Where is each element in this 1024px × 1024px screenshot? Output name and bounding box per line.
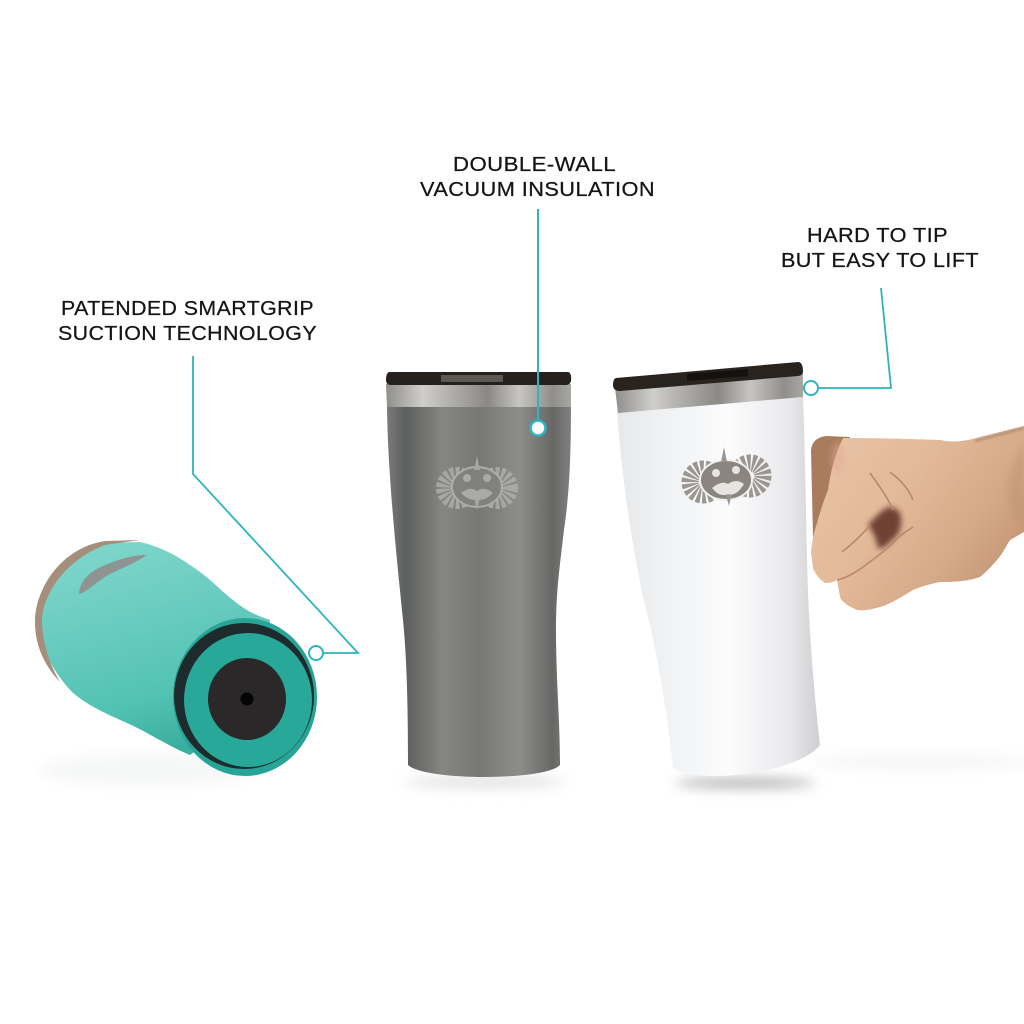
teal suction base — [184, 633, 312, 767]
fish logo on graphite tumbler — [444, 456, 510, 510]
marker dot — [530, 420, 546, 436]
lid — [386, 372, 571, 385]
wrist hair edge — [975, 428, 1024, 441]
leader line — [818, 288, 891, 388]
callout: suction technology — [58, 297, 358, 660]
finger fold shadow — [868, 507, 901, 549]
marker dot — [309, 646, 323, 660]
valve hole — [240, 692, 254, 706]
graphite body — [387, 400, 571, 777]
leader line — [193, 356, 358, 653]
steel rim — [35, 540, 140, 682]
white body — [617, 396, 820, 776]
callout heading — [420, 153, 655, 201]
callout heading: DOUBLE-WALL — [453, 153, 616, 176]
lid sip slider — [441, 375, 503, 382]
white tumbler tilted — [613, 362, 820, 776]
floor shadows — [40, 754, 1024, 788]
callout: vacuum insulation — [420, 153, 655, 436]
knuckle blush — [831, 442, 845, 474]
fist and forearm — [811, 426, 1024, 610]
laser-etched logo seen edge-on — [79, 555, 147, 594]
lid — [613, 362, 803, 391]
callout heading: VACUUM INSULATION — [420, 178, 655, 201]
callout heading — [781, 224, 979, 272]
hand gripping white tumbler — [811, 426, 1024, 610]
callout heading: HARD TO TIP — [807, 224, 948, 247]
callout heading — [58, 297, 317, 345]
lid sip slider — [687, 369, 748, 381]
finger creases — [837, 472, 913, 580]
thumb-side shadow behind fist — [811, 436, 850, 560]
rubber base outer ring — [173, 618, 317, 776]
callout heading: SUCTION TECHNOLOGY — [58, 322, 317, 345]
fish logo on white tumbler — [690, 447, 763, 506]
callout: hard to tip — [781, 224, 979, 395]
teal tumbler lying on its side — [35, 540, 317, 776]
graphite tumbler — [386, 372, 571, 777]
teal body — [40, 542, 270, 755]
leader line — [537, 209, 539, 421]
callout heading: BUT EASY TO LIFT — [781, 249, 979, 272]
steel band — [386, 384, 571, 407]
steel band — [615, 372, 803, 413]
black gasket ring — [174, 623, 314, 769]
callout heading: PATENDED SMARTGRIP — [61, 297, 314, 320]
marker dot — [804, 381, 818, 395]
black suction disc — [208, 658, 286, 740]
wrist shading — [1008, 445, 1024, 525]
